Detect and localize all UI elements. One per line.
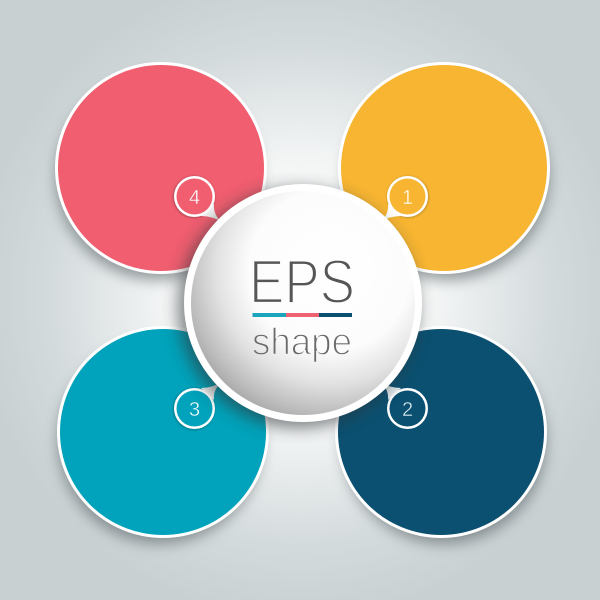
badge 2 [380, 382, 428, 429]
central circle [178, 184, 422, 428]
circle 4: pink segment [55, 62, 267, 280]
badge 3 [173, 382, 222, 430]
badge 2: 2 [402, 399, 413, 421]
badge 4 [173, 176, 222, 222]
badge 1: 1 [402, 187, 413, 209]
tricolor divider [252, 313, 352, 317]
title: EPS: EPS [249, 248, 355, 317]
subtitle: shape: shape [252, 322, 352, 364]
badge 4: 4 [189, 187, 200, 209]
badge 1 [380, 176, 429, 222]
badge 3: 3 [189, 399, 200, 421]
circle 1: yellow segment [338, 62, 550, 280]
circle 2: navy segment [335, 326, 547, 544]
circle 3: teal segment [57, 326, 269, 544]
